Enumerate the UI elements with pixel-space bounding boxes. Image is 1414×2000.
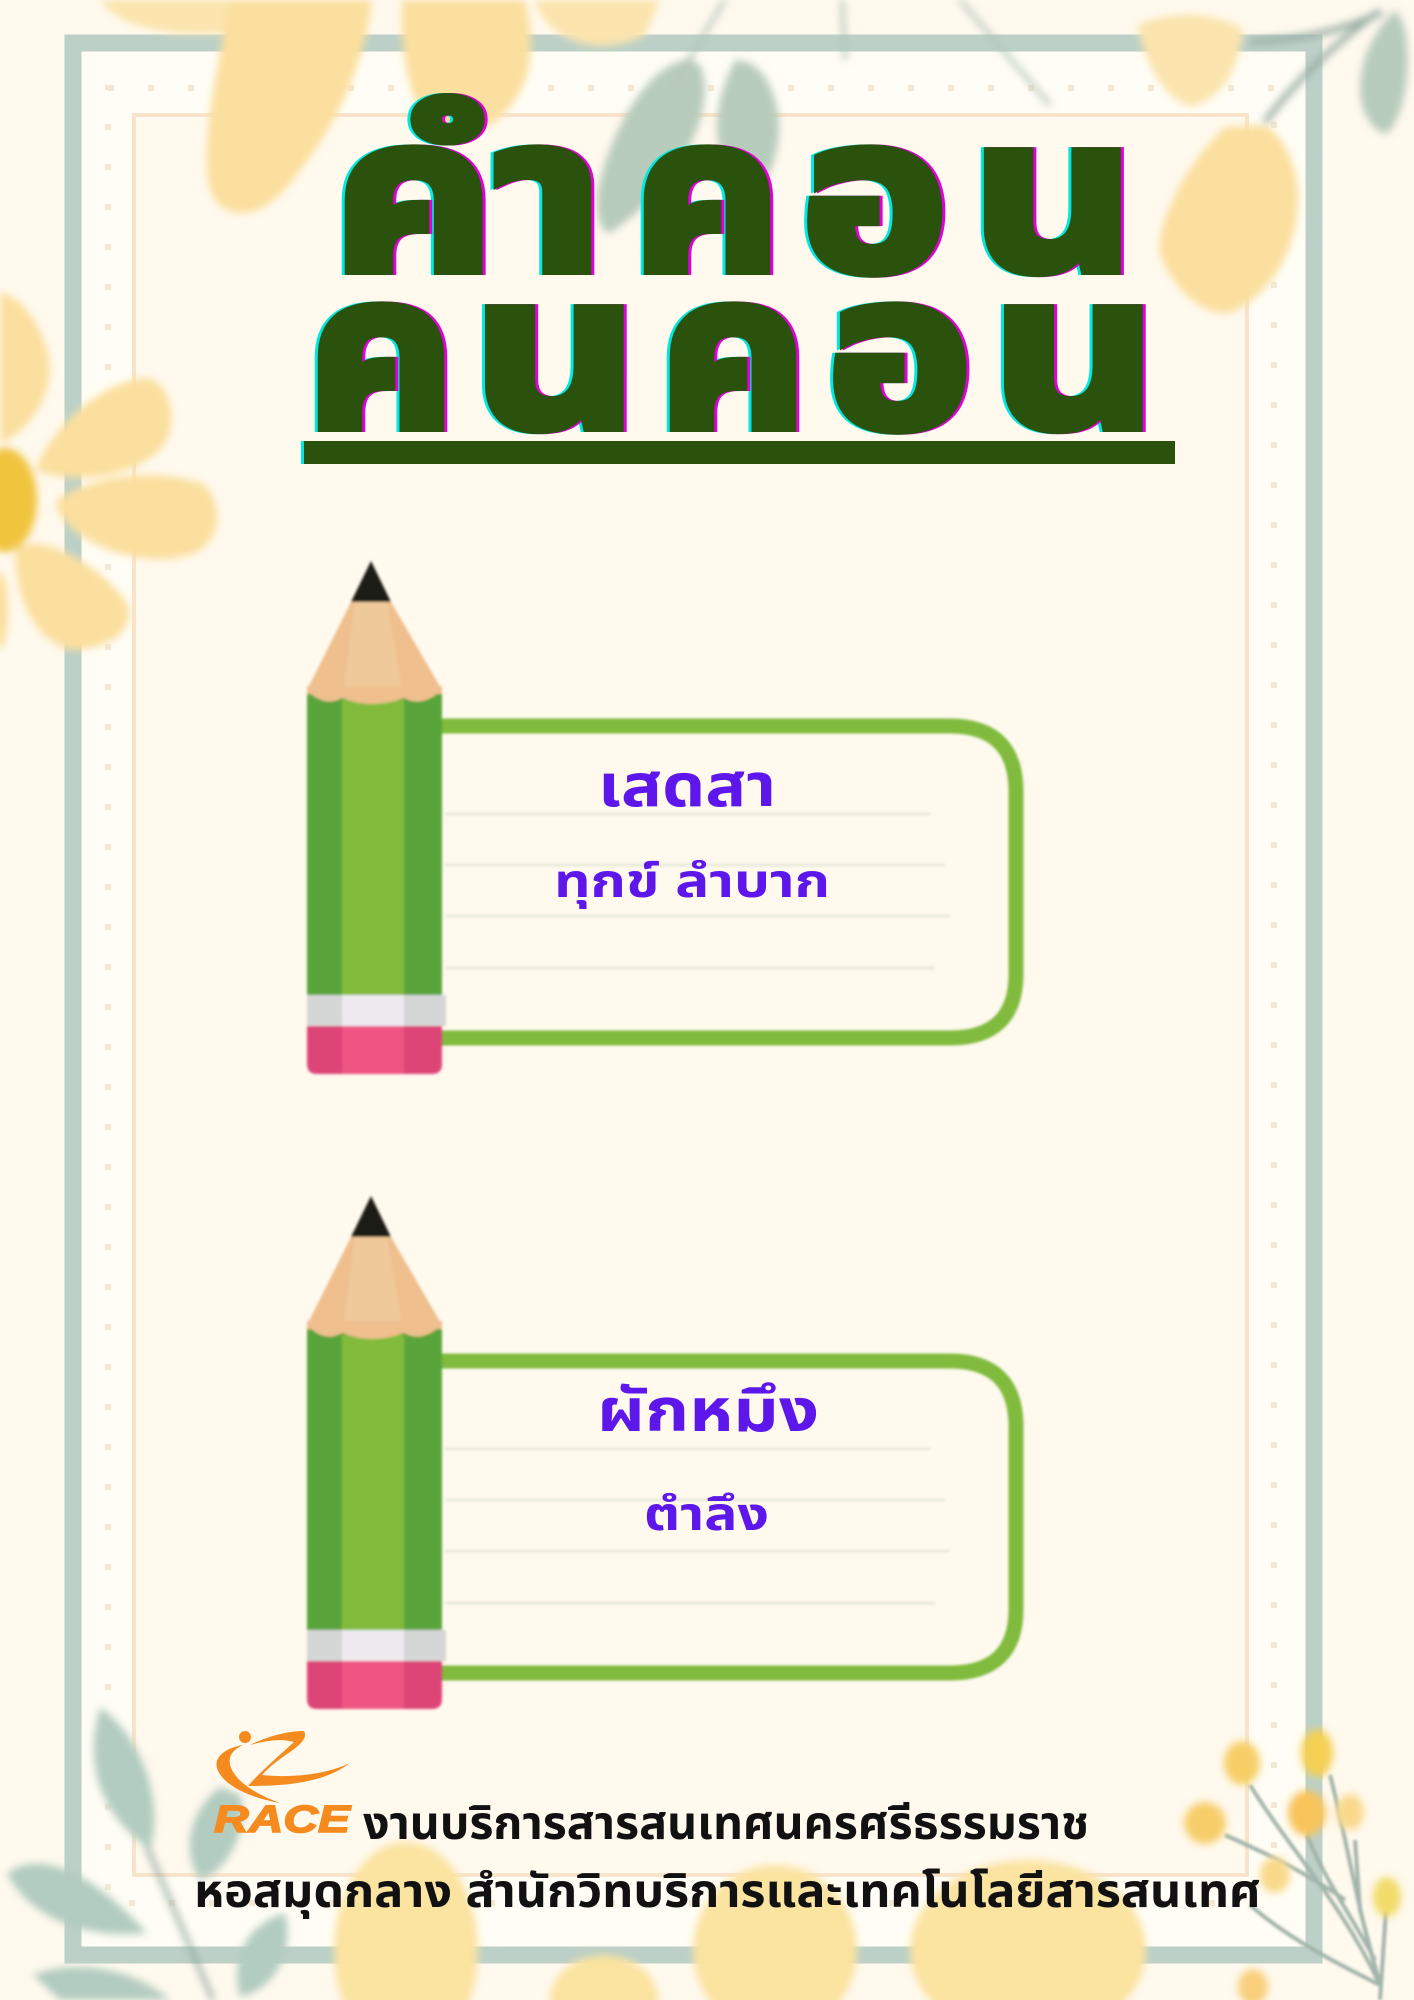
panel: เสดสา bbox=[307, 561, 1016, 1074]
text: ทุกข์ ลำบาก: ทุกข์ ลำบาก bbox=[554, 855, 830, 909]
footer line 2: หอสมุดกลาง สำนักวิทบริการและเทคโนโลยีสารสนเทศ bbox=[194, 1865, 1261, 1919]
text: ตำลึง: ตำลึง bbox=[644, 1488, 769, 1540]
flowers and leaves: top bbox=[100, 0, 1408, 313]
title line 1: น bbox=[972, 75, 1135, 316]
title line 1 bbox=[333, 75, 1135, 316]
title line 2: อ bbox=[827, 232, 972, 473]
icon: pencil bbox=[307, 1196, 446, 1709]
title line 2 bbox=[307, 232, 1157, 473]
title line 2: ค bbox=[307, 232, 455, 473]
footer line 1: งานบริการสารสนเทศนครศรีธรรมราช bbox=[363, 1797, 1089, 1849]
footer text bbox=[194, 1797, 1261, 1919]
heading: เสดสา: เสดสา bbox=[598, 752, 776, 819]
note card bbox=[430, 726, 1016, 1038]
icon: pencil bbox=[307, 561, 446, 1074]
title line 1: ค bbox=[633, 75, 781, 316]
title line 2: ค bbox=[659, 232, 807, 473]
branch: bottom right with yellow buds bbox=[1184, 1729, 1401, 2000]
title line 1: อ bbox=[801, 75, 948, 316]
note card bbox=[430, 1361, 1016, 1673]
logo mark bbox=[217, 1731, 350, 1803]
flower: left bbox=[0, 293, 217, 650]
title bbox=[301, 75, 1175, 473]
panel: ผักหมึง bbox=[307, 1196, 1016, 1709]
title line 1: คำ bbox=[333, 75, 603, 316]
flowers and leaves: bottom bbox=[7, 1707, 1146, 2000]
title line 2: น bbox=[473, 232, 638, 473]
heading: ผักหมึง: ผักหมึง bbox=[597, 1377, 819, 1444]
title underline bbox=[301, 441, 1175, 464]
logo wordmark: RACE bbox=[214, 1799, 352, 1841]
title line 2: น bbox=[992, 232, 1157, 473]
logo: RACE bbox=[214, 1731, 352, 1841]
